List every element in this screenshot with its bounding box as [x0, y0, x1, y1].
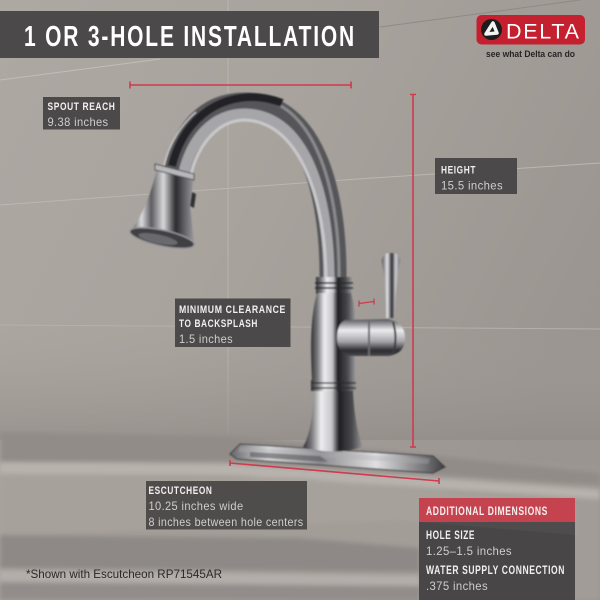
logo: see what Delta can do: [486, 49, 575, 60]
callout: spout reach: SPOUT REACH: [48, 101, 116, 113]
logo: DELTA: [506, 20, 580, 44]
callout: height: 15.5 inches: [441, 178, 503, 192]
callout: minimum clearance: [175, 298, 290, 347]
footnote: *Shown with Escutcheon RP71545AR: [26, 567, 222, 581]
panel: additional dimensions: [419, 498, 575, 600]
callout: height: [435, 158, 517, 194]
icon: delta circle: [481, 19, 502, 40]
faucet: [128, 97, 445, 473]
callout: height: HEIGHT: [441, 164, 476, 176]
lever: [382, 253, 400, 318]
callout: escutcheon: 10.25 inches wide: [148, 499, 244, 513]
panel header: ADDITIONAL DIMENSIONS: [426, 506, 548, 518]
line: spout reach: [130, 82, 351, 88]
dimension lines: [130, 82, 439, 484]
callout: minimum clearance: MINIMUM CLEARANCE: [179, 304, 286, 316]
line: clearance: [359, 298, 374, 306]
line: height: [410, 94, 416, 447]
panel header: [419, 498, 575, 522]
callout: minimum clearance: 1.5 inches: [179, 332, 233, 346]
spout: [164, 97, 339, 280]
panel: additional dimensions: 1.25–1.5 inches: [426, 544, 512, 558]
line: escutcheon width: [230, 460, 439, 484]
callout: spout reach: 9.38 inches: [48, 115, 108, 129]
callout: minimum clearance: TO BACKSPLASH: [179, 318, 258, 330]
title: 1 OR 3-HOLE INSTALLATION: [24, 21, 356, 53]
spray head: [128, 164, 196, 253]
callout: escutcheon: ESCUTCHEON: [148, 485, 212, 497]
neck collar: [316, 277, 352, 294]
callout: escutcheon: [146, 481, 307, 530]
body: [311, 293, 356, 380]
countertop: [0, 432, 600, 600]
title: [0, 11, 379, 58]
escutcheon: [230, 444, 445, 473]
logo: [476, 15, 585, 60]
callout: escutcheon: 8 inches between hole centers: [148, 515, 304, 529]
panel: additional dimensions: .375 inches: [426, 579, 488, 593]
panel: additional dimensions: HOLE SIZE: [426, 530, 475, 542]
callout: spout reach: [43, 97, 120, 130]
handle: [337, 319, 405, 356]
